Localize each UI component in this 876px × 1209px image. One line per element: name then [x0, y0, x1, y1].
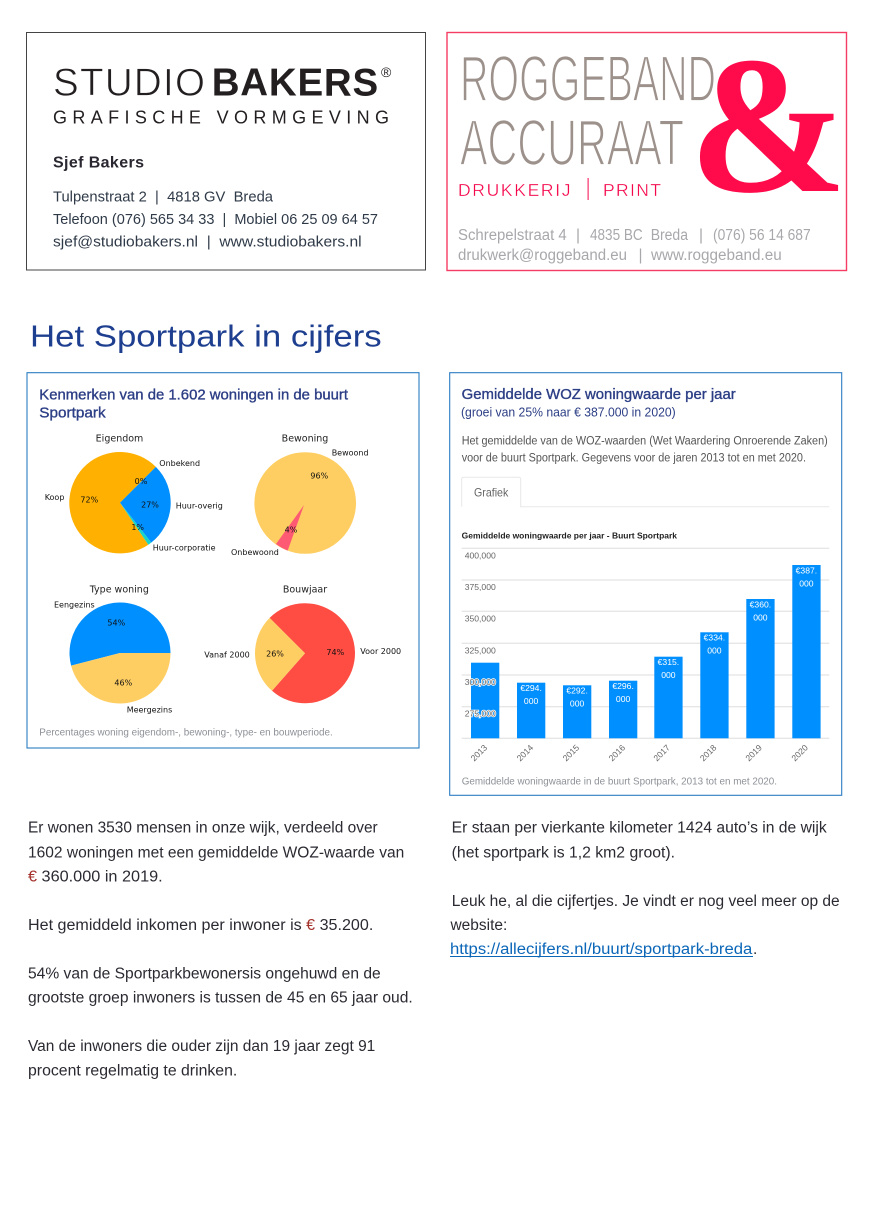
pie chart: Eigendom: Eigendom	[96, 434, 143, 445]
logo: Accuraat: ACCURAAT	[460, 106, 684, 179]
pie chart: Bouwjaar: Bouwjaar	[283, 584, 327, 595]
pie chart: Type woning: Eengezins	[54, 600, 95, 609]
bar chart: average home value: 325,000	[465, 645, 496, 655]
bar chart: average home value: 400,000	[465, 550, 496, 560]
logo: Studio Bakers: STUDIO	[53, 62, 205, 105]
bar chart: average home value: 000	[753, 612, 768, 622]
pie chart: Eigendom: Huur-corporatie	[153, 544, 216, 553]
logo: Studio Bakers	[53, 62, 392, 105]
panel heading	[39, 387, 348, 421]
address details: drukwerk@roggeband.eu	[458, 247, 627, 264]
text block: left column statistics: € 360.000 in 2019.	[28, 869, 163, 886]
contact details: Tulpenstraat 2 | 4818 GV Breda	[53, 190, 274, 206]
tagline: Drukkerij | Print: DRUKKERIJ	[458, 180, 570, 200]
bar chart: average home value: 300,000	[465, 677, 496, 687]
bar chart: average home value: 350,000	[465, 614, 496, 624]
bar chart: average home value: €315.	[658, 657, 679, 667]
text block: left column statistics: grootste groep inwoners is tussen de 45 en 65 jaar oud.	[28, 990, 413, 1007]
bar chart: average home value: €360.	[750, 599, 771, 609]
bar chart: average home value: 2016	[607, 742, 627, 763]
bar chart: average home value: 2014	[515, 742, 535, 763]
text block: left column statistics	[28, 820, 413, 1080]
bar chart: average home value: €387.	[796, 565, 817, 575]
bar chart: average home value: €334.	[704, 633, 725, 643]
address details: Schrepelstraat 4	[458, 227, 567, 244]
tagline: Drukkerij | Print	[458, 178, 661, 200]
contact name: Sjef Bakers	[53, 155, 144, 172]
panel: Roggeband Accuraat business card	[447, 16, 847, 270]
address details: |	[699, 227, 703, 244]
pie chart: Eigendom: 1%	[131, 523, 144, 532]
tab: Grafiek: Grafiek	[474, 486, 509, 500]
logo: ampersand: &	[689, 16, 847, 234]
address details	[458, 227, 811, 264]
pie chart: Bewoning: Bewoning	[282, 434, 328, 445]
pie chart: Eigendom: 27%	[141, 500, 159, 509]
text block: left column statistics: 54% van de Sportparkbewonersis ongehuwd en de	[28, 965, 381, 982]
text block: left column statistics: Het gemiddeld inkomen per inwoner is € 35.200.	[28, 917, 373, 934]
text block: right column cars and website	[450, 820, 840, 958]
bar chart: average home value: 2015	[561, 742, 581, 763]
tab: Grafiek	[462, 477, 829, 507]
panel heading: Kenmerken van de 1.602 woningen in de buurt	[39, 387, 348, 403]
panel: average WOZ value per year	[450, 373, 842, 795]
pie chart: Type woning	[54, 584, 172, 714]
pie chart: Type woning: 46%	[114, 679, 133, 688]
text block: right column cars and website: Er staan per vierkante kilometer 1424 auto’s in de wijk	[452, 820, 827, 837]
address details: 4835 BC	[590, 227, 643, 244]
pie chart: Bouwjaar: 74%	[326, 648, 345, 657]
pie chart: Bewoning	[231, 434, 369, 557]
pie chart: Type woning: Meergezins	[127, 705, 172, 714]
pie chart: Type woning: 54%	[107, 619, 126, 628]
bar chart: average home value: 2013	[469, 742, 489, 763]
pie chart: Eigendom	[45, 434, 223, 553]
bar chart: average home value: 000	[661, 670, 676, 680]
bar chart: average home value: 2018	[698, 742, 719, 763]
heading: Het Sportpark in cijfers: Het Sportpark in cijfers	[30, 319, 382, 354]
bar chart: average home value: 375,000	[465, 582, 496, 592]
bar chart: average home value: €292.	[566, 686, 588, 696]
panel: Studio Bakers business card	[26, 32, 426, 270]
contact details: Telefoon (076) 565 34 33 | Mobiel 06 25 09 64 57	[53, 212, 378, 228]
link: .	[753, 941, 757, 958]
description: Het gemiddelde van de WOZ-waarden (Wet Waardering Onroerende Zaken)	[462, 435, 828, 447]
panel: housing characteristics pie charts	[27, 373, 419, 748]
pie chart: Bouwjaar: Voor 2000	[360, 647, 401, 656]
address details: www.roggeband.eu	[650, 247, 782, 264]
panel caption: Gemiddelde woningwaarde in de buurt Sportpark, 2013 tot en met 2020.	[462, 775, 777, 787]
bar chart: average home value: 275,000	[465, 709, 496, 719]
bar chart: average home value: 2017	[651, 742, 672, 763]
text block: right column cars and website: (het sportpark is 1,2 km2 groot).	[452, 844, 675, 861]
pie chart: Bouwjaar: 26%	[266, 650, 284, 659]
address details: |	[576, 227, 580, 244]
contact details	[53, 190, 378, 251]
tagline: GRAFISCHE VORMGEVING	[53, 107, 389, 127]
text block: left column statistics: procent regelmatig te drinken.	[28, 1063, 237, 1080]
address details: |	[638, 247, 643, 264]
pie chart: Eigendom: Onbekend	[159, 459, 200, 468]
pie chart: Bewoning: Onbewoond	[231, 548, 279, 557]
pie chart: Eigendom: 0%	[135, 477, 148, 486]
pie chart: Type woning: Type woning	[89, 584, 149, 595]
bar chart: average home value: €296.	[612, 681, 634, 691]
link: https://allecijfers.nl/buurt/sportpark-breda	[450, 941, 753, 958]
bar chart: average home value: €294.	[520, 683, 542, 693]
panel heading: Sportpark	[39, 405, 106, 421]
bar chart: average home value: 000	[570, 699, 584, 709]
text block: right column cars and website: Leuk he, al die cijfertjes. Je vindt er nog veel meer op de	[452, 893, 840, 910]
pie chart: Eigendom: Koop	[45, 493, 64, 502]
bar chart: average home value: 000	[616, 694, 630, 704]
panel heading: Gemiddelde WOZ woningwaarde per jaar	[462, 387, 736, 403]
chart title: Gemiddelde woningwaarde per jaar - Buurt Sportpark	[462, 531, 677, 541]
pie chart: Bewoning: 4%	[285, 526, 298, 535]
text block: left column statistics: Van de inwoners die ouder zijn dan 19 jaar zegt 91	[28, 1038, 375, 1055]
pie chart: Bewoning: 96%	[310, 471, 329, 480]
bar chart: average home value: 000	[524, 696, 538, 706]
logo: Roggeband: ROGGEBAND	[460, 42, 716, 115]
text block: right column cars and website: website:	[450, 917, 507, 934]
bar chart: average home value: 2020	[789, 742, 810, 763]
pie chart: Bouwjaar	[204, 584, 401, 703]
pie chart: Eigendom: 72%	[80, 496, 99, 505]
bar chart: average home value: 000	[707, 646, 722, 656]
tagline: Drukkerij | Print: PRINT	[603, 180, 661, 200]
bar chart: average home value: 2019	[743, 742, 764, 763]
description	[462, 435, 828, 465]
logo: Studio Bakers: BAKERS	[212, 62, 378, 105]
pie chart: Bouwjaar: Vanaf 2000	[204, 650, 250, 659]
logo: Studio Bakers: ®	[381, 64, 392, 80]
address details: (076) 56 14 687	[713, 227, 811, 244]
panel subheading: (groei van 25% naar € 387.000 in 2020)	[461, 406, 676, 420]
text block: left column statistics: 1602 woningen met een gemiddelde WOZ-waarde van	[28, 844, 404, 861]
panel caption: Percentages woning eigendom-, bewoning-, type- en bouwperiode.	[39, 727, 333, 739]
address details: Breda	[651, 227, 688, 244]
bar chart: average home value: 000	[799, 578, 814, 588]
bar chart: average home value	[462, 548, 829, 763]
text block: left column statistics: Er wonen 3530 mensen in onze wijk, verdeeld over	[28, 820, 378, 837]
pie chart: Bewoning: Bewoond	[332, 449, 369, 458]
contact details: sjef@studiobakers.nl | www.studiobakers.nl	[53, 235, 362, 251]
pie chart: Eigendom: Huur-overig	[176, 502, 223, 511]
description: voor de buurt Sportpark. Gegevens voor de jaren 2013 tot en met 2020.	[462, 453, 806, 465]
